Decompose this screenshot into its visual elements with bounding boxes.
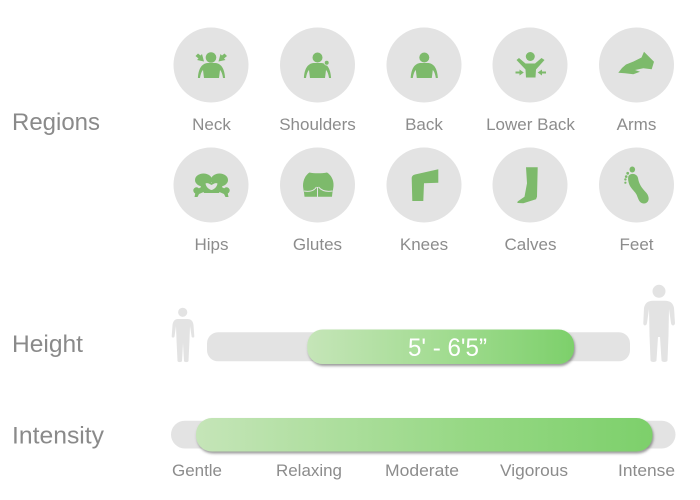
region: Back: Back xyxy=(405,115,443,134)
region: Knees: Knees xyxy=(400,235,448,254)
icon: hips xyxy=(193,174,230,197)
icon: tall person xyxy=(643,285,675,362)
icon: arms xyxy=(618,52,654,74)
heading: Height: Height xyxy=(12,331,83,358)
icon: glutes xyxy=(303,172,334,197)
region: Feet: Feet xyxy=(619,235,654,254)
intensity scale labels: Relaxing xyxy=(276,461,342,480)
heading: Intensity: Intensity xyxy=(12,422,105,450)
intensity scale labels: Vigorous xyxy=(500,461,568,480)
range value: 5' - 6'5” xyxy=(408,334,487,362)
icon: shoulders xyxy=(304,52,331,78)
region: Calves: Calves xyxy=(505,235,556,254)
region: Shoulders xyxy=(279,28,356,134)
slider track xyxy=(207,332,630,361)
region: Hips xyxy=(174,148,248,254)
region: Neck xyxy=(174,28,248,134)
icon: lower back xyxy=(516,52,546,78)
region: Glutes: Glutes xyxy=(293,235,342,254)
icon: calves xyxy=(517,167,538,203)
region: Lower Back: Lower Back xyxy=(486,115,575,134)
intensity scale labels: Gentle xyxy=(172,461,222,480)
region: Hips: Hips xyxy=(194,235,229,254)
intensity scale labels: Moderate xyxy=(385,461,459,480)
region: Arms xyxy=(599,28,674,134)
region: Arms: Arms xyxy=(617,115,656,134)
region: Lower Back xyxy=(486,28,575,134)
region: Shoulders: Shoulders xyxy=(279,115,356,134)
intensity scale labels xyxy=(172,461,675,480)
intensity slider xyxy=(171,418,676,452)
region: Back xyxy=(386,28,462,134)
region: Glutes xyxy=(280,148,355,254)
intensity scale labels: Intense xyxy=(618,461,675,480)
icon: neck xyxy=(196,52,227,78)
icon: knees xyxy=(412,169,438,201)
height slider xyxy=(207,330,630,364)
slider range xyxy=(307,330,574,364)
region: Calves xyxy=(492,148,568,254)
icon: small person xyxy=(172,308,194,362)
region: Neck: Neck xyxy=(192,115,231,134)
slider range xyxy=(196,418,652,452)
heading: Regions: Regions xyxy=(12,109,100,136)
slider track xyxy=(171,421,676,448)
icon: feet xyxy=(624,166,649,204)
region: Knees xyxy=(386,148,462,254)
icon: back xyxy=(411,52,438,78)
region: Feet xyxy=(599,148,674,254)
